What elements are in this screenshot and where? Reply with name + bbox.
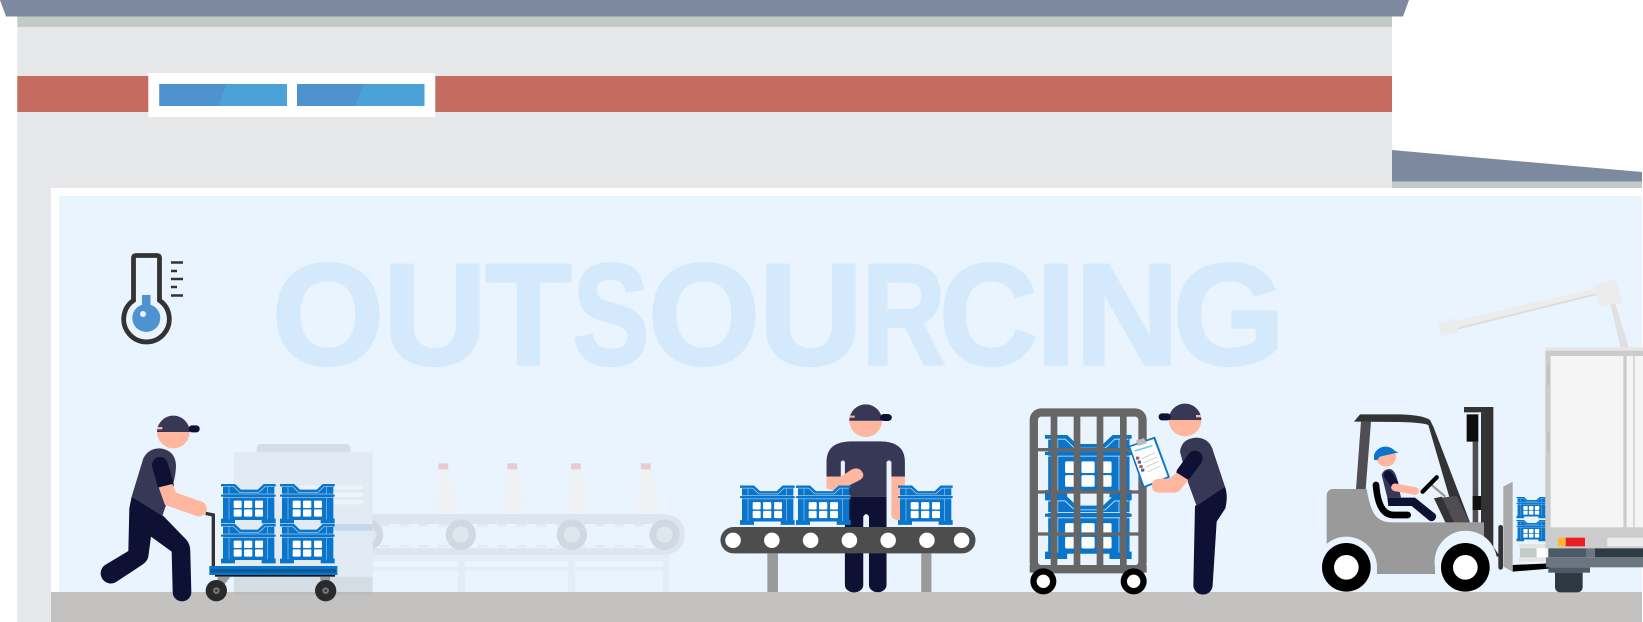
- title watermark: I: [1036, 234, 1076, 395]
- rear post: [1356, 422, 1371, 489]
- small crates on forks: [1516, 497, 1546, 541]
- interior background: [59, 196, 1642, 592]
- faded conveyor with bottles: [353, 463, 684, 592]
- inspector: [1128, 404, 1227, 595]
- bottles: [434, 463, 659, 513]
- dark conveyor belt: [720, 527, 976, 553]
- conveyor belt: [360, 514, 684, 555]
- worker pushing cart: [101, 416, 337, 601]
- crates on cart: [221, 484, 335, 563]
- driver: [1374, 447, 1436, 521]
- truck box: [1545, 347, 1643, 536]
- crates on conveyor: [740, 486, 953, 525]
- clipboard: [1128, 437, 1170, 488]
- fork and carriage: [1498, 482, 1549, 572]
- icon: thermometer: [124, 256, 183, 342]
- mast: [1464, 407, 1500, 557]
- faded filling machine: [234, 444, 373, 595]
- cart: [206, 513, 337, 601]
- roll cage: [1030, 412, 1147, 594]
- floor: [51, 592, 1642, 622]
- title watermark: T: [486, 234, 572, 395]
- worker: [827, 404, 905, 592]
- title watermark: N: [1075, 234, 1179, 395]
- worker behind dark conveyor: [720, 404, 976, 592]
- forklift body: [1320, 489, 1497, 592]
- forklift: [1320, 407, 1549, 592]
- title watermark: G: [1173, 234, 1285, 395]
- title watermark: S: [572, 234, 649, 395]
- roof: [0, 0, 1409, 16]
- window: [148, 73, 435, 117]
- truck rear lights and bumper: [1545, 536, 1643, 592]
- truck: [1545, 347, 1643, 592]
- title watermark: U: [759, 234, 863, 395]
- conveyor rollers: [353, 519, 680, 550]
- truck lift arm: [1439, 281, 1629, 348]
- roof trim: [17, 16, 1392, 27]
- cab roof: [1354, 414, 1470, 522]
- side roof: [1392, 150, 1642, 188]
- title watermark: R: [862, 234, 946, 395]
- conveyor legs: [767, 553, 931, 592]
- crates in cage: [1045, 435, 1132, 559]
- dashboard: [1423, 477, 1469, 522]
- roll cage and inspector: [1030, 404, 1227, 595]
- title watermark: C: [939, 234, 1038, 395]
- title watermark: O: [272, 234, 384, 395]
- red stripe: [17, 76, 1392, 112]
- worker: [101, 416, 207, 601]
- forklift seat: [1376, 485, 1408, 515]
- conveyor legs: [360, 555, 669, 592]
- title watermark: O: [648, 234, 760, 395]
- interior frame: [51, 188, 1642, 622]
- title watermark: U: [383, 234, 487, 395]
